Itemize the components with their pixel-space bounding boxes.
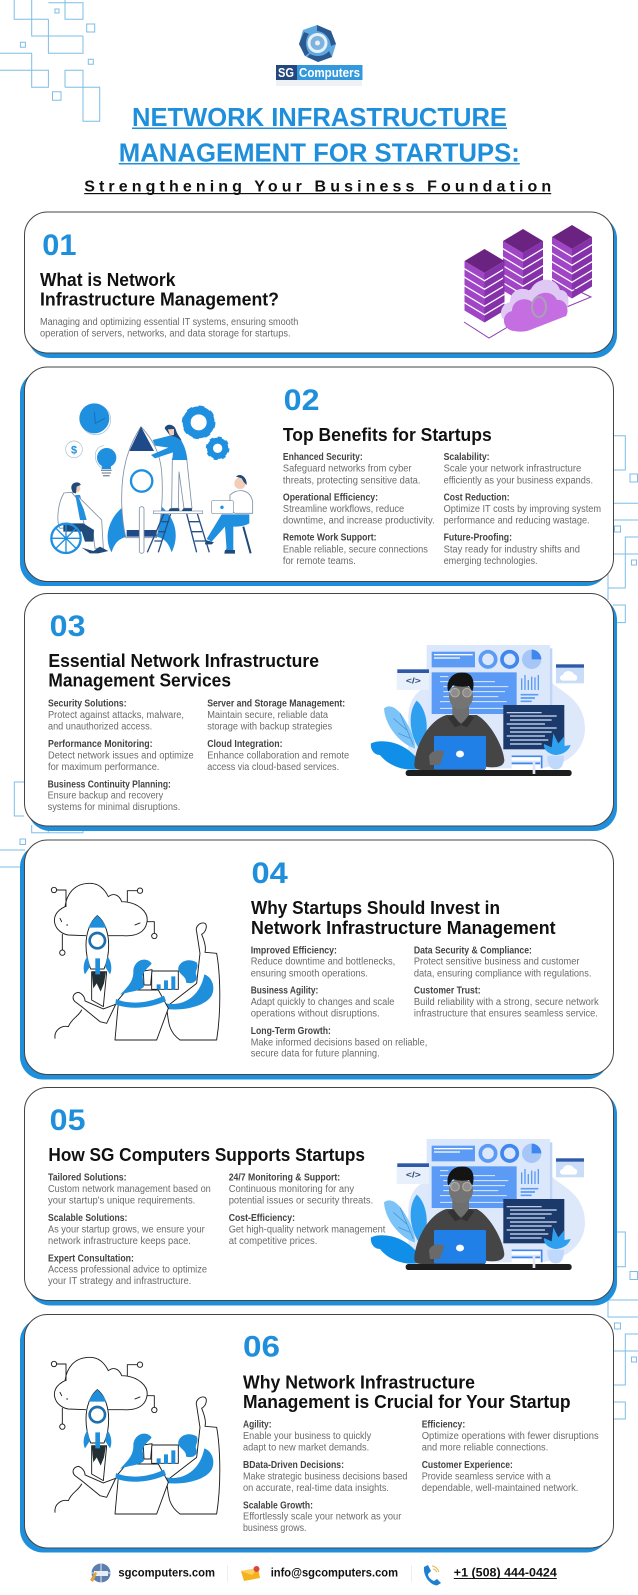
ladder platform bbox=[147, 511, 209, 552]
icon: cloud window bbox=[556, 664, 584, 683]
service: business continuity planning: Ensure backup and recovery bbox=[48, 791, 163, 802]
support: scalable solutions bbox=[48, 1213, 205, 1247]
support: monitoring: potential issues or security threats. bbox=[229, 1196, 373, 1207]
service: cloud integration: Enhance collaboration and remote bbox=[207, 750, 350, 761]
illustration: team building rocket bbox=[51, 403, 253, 554]
service: server and storage management: Server and Storage Management: bbox=[207, 699, 345, 710]
service: performance monitoring: Performance Monitoring: bbox=[48, 739, 153, 750]
support: tailored solutions: Tailored Solutions: bbox=[48, 1173, 127, 1184]
point: data-driven decisions: BData-Driven Decisions: bbox=[243, 1460, 344, 1471]
service: business continuity planning bbox=[48, 779, 180, 813]
icon: dollar bbox=[66, 441, 82, 458]
benefit: operational efficiency: downtime, and increase productivity. bbox=[283, 516, 435, 527]
benefit: scalability: Scalability: bbox=[444, 452, 490, 463]
support: scalable solutions: network infrastructure keeps pace. bbox=[48, 1236, 191, 1247]
point: customer experience: Customer Experience: bbox=[422, 1460, 513, 1471]
icon: dollar: $ bbox=[71, 444, 77, 456]
benefit: remote work support: Remote Work Support: bbox=[283, 533, 376, 544]
support: tailored solutions: Custom network management based on bbox=[48, 1184, 211, 1195]
heading: What is Network bbox=[40, 270, 176, 290]
rocket bbox=[108, 427, 176, 553]
support: scalable solutions: As your startup grows, we ensure your bbox=[48, 1224, 205, 1235]
point: customer experience bbox=[422, 1460, 578, 1494]
illustration: team with cloud rocket bbox=[51, 883, 220, 1040]
point: agility: adapt to new market demands. bbox=[243, 1443, 369, 1454]
point: efficiency bbox=[422, 1420, 599, 1454]
reason: business agility: operations without disruptions. bbox=[251, 1009, 380, 1020]
reason: long-term growth: Make informed decisions based on reliable, bbox=[251, 1037, 427, 1048]
logo bbox=[276, 25, 362, 86]
service: cloud integration bbox=[207, 739, 350, 773]
icon: phone bbox=[424, 1565, 441, 1586]
point: scalable growth: Effortlessly scale your network as your bbox=[243, 1512, 402, 1523]
description: operation of servers, networks, and data storage for startups. bbox=[40, 329, 291, 340]
benefit: remote work support bbox=[283, 533, 428, 567]
benefit: future-proofing bbox=[444, 533, 580, 567]
reason: improved efficiency: Improved Efficiency: bbox=[251, 945, 337, 956]
icon: servers and cloud bbox=[464, 225, 592, 338]
point: scalable growth: business grows. bbox=[243, 1523, 306, 1534]
support: scalable solutions: Scalable Solutions: bbox=[48, 1213, 127, 1224]
service: security solutions: and unauthorized access. bbox=[48, 722, 152, 733]
low cloud bbox=[55, 1010, 82, 1038]
support: expert consultation: Expert Consultation: bbox=[48, 1253, 134, 1264]
number 05: 05 bbox=[50, 1104, 86, 1137]
benefit: enhanced security: Enhanced Security: bbox=[283, 452, 363, 463]
reason: business agility bbox=[251, 986, 395, 1020]
footer contact bar bbox=[90, 1564, 557, 1586]
man with laptop bbox=[205, 475, 253, 554]
point: agility: Agility: bbox=[243, 1420, 272, 1431]
title: NETWORK INFRASTRUCTURE bbox=[132, 102, 507, 132]
service: server and storage management: storage with backup strategies bbox=[207, 722, 332, 733]
heading: How SG Computers Supports Startups bbox=[48, 1145, 365, 1165]
reason: business agility: Business Agility: bbox=[251, 986, 318, 997]
service: cloud integration: access via cloud-based services. bbox=[207, 762, 339, 773]
reason: data security and compliance: data, ensuring compliance with regulations. bbox=[414, 968, 591, 979]
number 01: 01 bbox=[42, 229, 76, 262]
reason: long-term growth: Long-Term Growth: bbox=[251, 1026, 331, 1037]
service: server and storage management bbox=[207, 699, 345, 733]
icon: envelope bbox=[241, 1566, 260, 1581]
plants bbox=[371, 701, 427, 770]
panel: why startups should invest bbox=[20, 840, 614, 1080]
heading bbox=[243, 1372, 571, 1412]
support: cost-efficiency bbox=[229, 1213, 386, 1247]
point: scalable growth: Scalable Growth: bbox=[243, 1500, 313, 1511]
illustration: team with cloud rocket bbox=[51, 1357, 220, 1514]
benefit: cost reduction: performance and reducing wastage. bbox=[444, 516, 590, 527]
person bbox=[414, 673, 504, 770]
title: MANAGEMENT FOR STARTUPS: bbox=[119, 138, 520, 168]
description bbox=[40, 317, 298, 340]
point: data-driven decisions: on accurate, real-time data insights. bbox=[243, 1483, 389, 1494]
reason: improved efficiency: ensuring smooth operations. bbox=[251, 968, 368, 979]
logo banner: SG bbox=[278, 65, 294, 80]
service: performance monitoring: for maximum performance. bbox=[48, 762, 160, 773]
illustration: man with laptop and dashboards bbox=[371, 645, 585, 776]
benefit: future-proofing: emerging technologies. bbox=[444, 556, 538, 567]
benefit: cost reduction: Cost Reduction: bbox=[444, 492, 510, 503]
benefit: operational efficiency bbox=[283, 492, 435, 527]
woman on platform bbox=[151, 425, 192, 511]
email: info@sgcomputers.com bbox=[271, 1568, 398, 1580]
point: agility: Enable your business to quickly bbox=[243, 1431, 371, 1442]
service: cloud integration: Cloud Integration: bbox=[207, 739, 282, 750]
point: data-driven decisions bbox=[243, 1460, 407, 1494]
icon: light bulb bbox=[95, 446, 116, 476]
support: expert consultation: Access professional advice to optimize bbox=[48, 1265, 207, 1276]
logo banner bbox=[276, 65, 362, 86]
number 06: 06 bbox=[243, 1331, 280, 1364]
reason: customer trust bbox=[414, 986, 600, 1020]
support: cost-efficiency: at competitive prices. bbox=[229, 1236, 317, 1247]
support: monitoring: 24/7 Monitoring & Support: bbox=[229, 1173, 340, 1184]
point: data-driven decisions: Make strategic business decisions based bbox=[243, 1471, 407, 1482]
reason: long-term growth: secure data for future planning. bbox=[251, 1049, 380, 1060]
heading bbox=[48, 651, 319, 691]
support: expert consultation bbox=[48, 1253, 207, 1287]
panel: what is network infrastructure management bbox=[24, 212, 617, 358]
point: scalable growth bbox=[243, 1500, 402, 1534]
reason: business agility: Adapt quickly to changes and scale bbox=[251, 997, 395, 1008]
man in wheelchair bbox=[51, 482, 108, 553]
subtitle: Strengthening Your Business Foundation bbox=[84, 178, 551, 196]
benefit: remote work support: for remote teams. bbox=[283, 556, 356, 567]
benefit: scalability bbox=[444, 452, 593, 486]
reason: improved efficiency bbox=[251, 945, 395, 979]
benefit: scalability: Scale your network infrastructure bbox=[444, 464, 582, 475]
benefit: operational efficiency: Streamline workflows, reduce bbox=[283, 504, 405, 515]
benefit: cost reduction: Optimize IT costs by improving system bbox=[444, 504, 601, 515]
support: tailored solutions: your startup's unique requirements. bbox=[48, 1196, 195, 1207]
illustration: man with laptop and dashboards bbox=[371, 1139, 585, 1270]
benefit: enhanced security: threats, protecting sensitive data. bbox=[283, 475, 420, 486]
reason: long-term growth bbox=[251, 1026, 427, 1060]
icon: small gear bbox=[207, 438, 228, 459]
heading: Infrastructure Management? bbox=[40, 290, 279, 310]
description: Managing and optimizing essential IT systems, ensuring smooth bbox=[40, 317, 298, 328]
reason: customer trust: Customer Trust: bbox=[414, 986, 481, 997]
service: security solutions: Security Solutions: bbox=[48, 699, 127, 710]
reason: data security and compliance: Data Security & Compliance: bbox=[414, 945, 532, 956]
panel: essential services bbox=[24, 594, 617, 831]
benefit: future-proofing: Future-Proofing: bbox=[444, 533, 512, 544]
number 02: 02 bbox=[284, 384, 320, 417]
heading: Essential Network Infrastructure bbox=[48, 651, 319, 671]
reason: improved efficiency: Reduce downtime and bottlenecks, bbox=[251, 957, 395, 968]
panel: how SG Computers supports startups bbox=[24, 1088, 617, 1306]
number 04: 04 bbox=[252, 857, 288, 890]
terminal window bbox=[503, 705, 564, 749]
service: security solutions bbox=[48, 699, 184, 733]
desk bbox=[406, 770, 572, 776]
point: efficiency: and more reliable connections. bbox=[422, 1443, 548, 1454]
point: agility bbox=[243, 1420, 371, 1454]
benefit: cost reduction bbox=[444, 492, 601, 527]
number 03: 03 bbox=[50, 610, 86, 643]
cloud with connectors bbox=[51, 883, 157, 955]
icon: code window bbox=[397, 669, 429, 690]
service: business continuity planning: systems for minimal disruptions. bbox=[48, 802, 180, 813]
benefit: remote work support: Enable reliable, secure connections bbox=[283, 544, 428, 555]
heading: Why Startups Should Invest in bbox=[251, 898, 500, 918]
icon: logo swirl bbox=[299, 25, 336, 62]
service: server and storage management: Maintain secure, reliable data bbox=[207, 710, 328, 721]
books bbox=[512, 756, 542, 774]
support: expert consultation: your IT strategy and infrastructure. bbox=[48, 1276, 191, 1287]
point: efficiency: Efficiency: bbox=[422, 1420, 465, 1431]
point: efficiency: Optimize operations with fewer disruptions bbox=[422, 1431, 599, 1442]
service: performance monitoring: Detect network issues and optimize bbox=[48, 750, 194, 761]
benefit: scalability: efficiently as your business expands. bbox=[444, 475, 593, 486]
website: sgcomputers.com bbox=[118, 1568, 215, 1580]
heading: Management Services bbox=[48, 671, 231, 691]
icon: globe bbox=[90, 1564, 110, 1582]
heading: Management is Crucial for Your Startup bbox=[243, 1392, 571, 1412]
panel: top benefits bbox=[20, 367, 614, 586]
service: business continuity planning: Business Continuity Planning: bbox=[48, 779, 171, 790]
benefit: enhanced security: Safeguard networks from cyber bbox=[283, 464, 412, 475]
reason: customer trust: infrastructure that ensures seamless service. bbox=[414, 1009, 598, 1020]
heading: Why Network Infrastructure bbox=[243, 1372, 475, 1392]
icon: clock bbox=[79, 403, 111, 435]
woman with raised arm bbox=[166, 923, 220, 1040]
heading bbox=[251, 898, 556, 938]
point: customer experience: dependable, well-maintained network. bbox=[422, 1483, 578, 1494]
support: tailored solutions bbox=[48, 1173, 211, 1207]
heading: Network Infrastructure Management bbox=[251, 918, 556, 938]
benefit: future-proofing: Stay ready for industry shifts and bbox=[444, 544, 580, 555]
heading bbox=[40, 270, 279, 310]
icon: large gear bbox=[183, 407, 214, 438]
tablet chart bbox=[152, 971, 178, 990]
reason: data security and compliance bbox=[414, 945, 591, 979]
title bbox=[119, 102, 520, 168]
benefit: enhanced security bbox=[283, 452, 420, 486]
support: cost-efficiency: Get high-quality network management bbox=[229, 1224, 386, 1235]
panel: why network infrastructure management is crucial bbox=[20, 1314, 614, 1552]
service: performance monitoring bbox=[48, 739, 194, 773]
support: cost-efficiency: Cost-Efficiency: bbox=[229, 1213, 295, 1224]
potted plant bbox=[544, 733, 571, 769]
support: monitoring: Continuous monitoring for any bbox=[229, 1184, 354, 1195]
heading: Top Benefits for Startups bbox=[283, 425, 492, 445]
reason: data security and compliance: Protect sensitive business and customer bbox=[414, 957, 580, 968]
point: customer experience: Provide seamless service with a bbox=[422, 1471, 551, 1482]
phone number: +1 (508) 444-0424 bbox=[454, 1568, 557, 1580]
woman with blue hair bbox=[73, 960, 168, 1040]
logo banner: Computers bbox=[299, 65, 360, 80]
benefit: operational efficiency: Operational Efficiency: bbox=[283, 492, 378, 503]
rocket bbox=[84, 916, 111, 1007]
icon: code window: </> bbox=[406, 676, 421, 686]
service: security solutions: Protect against attacks, malware, bbox=[48, 710, 184, 721]
reason: customer trust: Build reliability with a strong, secure network bbox=[414, 997, 600, 1008]
support: monitoring bbox=[229, 1173, 373, 1207]
